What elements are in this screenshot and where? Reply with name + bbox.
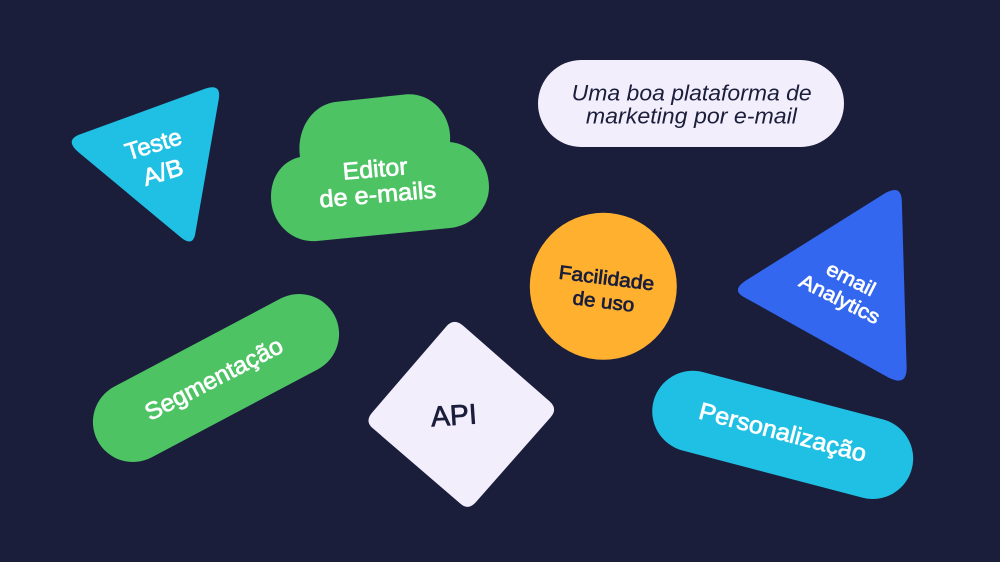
diamond: API: API	[430, 399, 478, 434]
circle: Facilidade de uso: de uso	[571, 287, 636, 317]
title pill	[538, 60, 844, 147]
pill: Personalização	[643, 362, 922, 508]
triangle: Teste A/B: Teste	[122, 123, 185, 166]
triangle: email Analytics: Analytics	[796, 270, 883, 329]
cloud: Editor de e-mails: de e-mails	[318, 177, 437, 213]
title pill: Uma boa plataforma de	[572, 80, 812, 106]
pill: Personalização: Personalização	[696, 398, 869, 468]
triangle: email Analytics	[738, 190, 907, 381]
pill: Segmentação: Segmentação	[140, 332, 288, 426]
title pill: marketing por e-mail	[586, 104, 798, 128]
circle: Facilidade de uso: Facilidade	[557, 262, 655, 295]
triangle: email Analytics: email	[823, 258, 879, 301]
cloud: Editor de e-mails: Editor	[342, 153, 409, 186]
circle: Facilidade de uso	[530, 213, 677, 360]
triangle: Teste A/B: A/B	[140, 154, 187, 192]
diamond: API	[368, 322, 554, 507]
cloud: Editor de e-mails	[271, 94, 489, 241]
pill: Segmentação	[79, 280, 353, 476]
triangle: Teste A/B	[72, 87, 219, 242]
